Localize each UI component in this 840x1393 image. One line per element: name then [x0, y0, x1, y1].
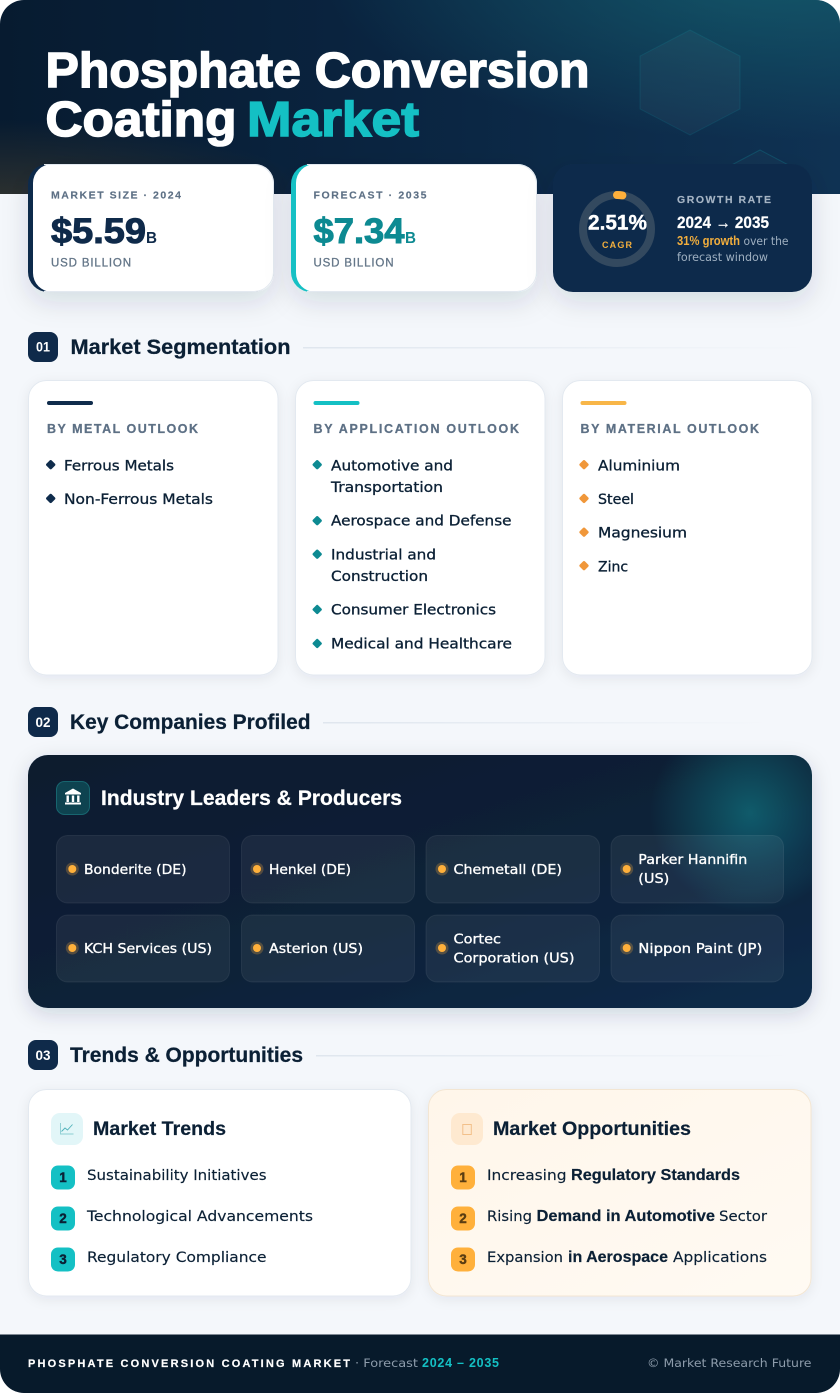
stat card: CAGR growth rate: GROWTH RATE — [677, 194, 771, 206]
donut gauge: CAGR — [602, 240, 632, 250]
stat card: market size 2024: MARKET SIZE · 2024 — [51, 190, 181, 202]
trend 1 — [51, 1166, 266, 1190]
opportunity 2: Sector — [719, 1209, 767, 1225]
opportunity 3: 3 — [459, 1252, 467, 1267]
stat card: market size 2024: B — [146, 230, 157, 247]
footer: PHOSPHATE CONVERSION COATING MARKET — [28, 1358, 350, 1370]
panel: market trends: Market Trends — [93, 1119, 226, 1140]
trend 2: 2 — [59, 1211, 67, 1226]
opportunity 2: Demand in Automotive — [536, 1208, 715, 1225]
title: Coating — [46, 93, 237, 147]
opportunity 1: Regulatory Standards — [571, 1167, 740, 1184]
stat card: market size 2024 — [28, 164, 274, 292]
panel: by material outlook: Aluminium — [598, 458, 680, 474]
title: Phosphate Conversion — [46, 44, 590, 98]
trend 1: Sustainability Initiatives — [87, 1168, 266, 1184]
opportunity 3: Expansion — [487, 1250, 563, 1266]
company chip: Nippon Paint — [611, 915, 784, 982]
icon: placeholder box — [451, 1113, 483, 1145]
section heading: trends and opportunities — [28, 1040, 796, 1070]
panel: by application outlook: Aerospace and Defense — [331, 514, 512, 530]
company chip: Parker Hannifin: Parker Hannifin — [638, 852, 747, 868]
company chip: Cortec: Cortec — [454, 932, 501, 948]
opportunity 3: Applications — [673, 1250, 767, 1266]
stat card: forecast 2035: $7.34 — [314, 212, 405, 251]
trend 2: Technological Advancements — [86, 1209, 313, 1225]
panel: by material outlook: Zinc — [598, 560, 628, 576]
company chip: Bonderite: Bonderite (DE) — [84, 862, 186, 878]
section heading: key companies: Key Companies Profiled — [70, 711, 310, 734]
trend 2 — [51, 1206, 313, 1230]
company chip: KCH Services: KCH Services (US) — [84, 941, 212, 957]
footer: 2024 – 2035 — [422, 1356, 499, 1370]
donut gauge — [583, 195, 651, 263]
section heading: key companies — [28, 707, 773, 737]
panel: market opportunities — [428, 1090, 811, 1296]
panel: by application outlook: Construction — [331, 569, 428, 585]
panel: by metal outlook: Ferrous Metals — [64, 458, 174, 474]
panel: by application outlook: Industrial and — [331, 548, 436, 564]
panel: by application outlook: Automotive and — [331, 458, 453, 474]
footer — [0, 1334, 840, 1393]
opportunity 1: Increasing — [487, 1168, 566, 1184]
stat card: market size 2024: $5.59 — [51, 212, 146, 251]
stat card: CAGR growth rate: forecast window — [677, 250, 768, 264]
opportunity 3 — [451, 1248, 767, 1272]
company chip: Bonderite — [56, 836, 230, 903]
trend 3 — [51, 1248, 267, 1272]
stat card: forecast 2035: FORECAST · 2035 — [314, 190, 427, 202]
panel: by application outlook: BY APPLICATION OUTLOOK — [314, 422, 519, 436]
company chip: KCH Services — [56, 915, 230, 982]
icon: chart — [51, 1113, 83, 1145]
stat card: forecast 2035: USD BILLION — [314, 258, 394, 270]
company chip: Cortec — [426, 915, 600, 982]
section heading: market segmentation: 01 — [36, 340, 50, 354]
company chip: Asterion: Asterion (US) — [269, 941, 363, 957]
section heading: market segmentation — [28, 332, 812, 362]
panel: by material outlook: BY MATERIAL OUTLOOK — [580, 422, 759, 436]
panel: industry leaders — [28, 755, 812, 1008]
icon: bank — [56, 782, 90, 814]
section heading: key companies: 02 — [36, 715, 50, 730]
opportunity 2: Rising — [487, 1209, 532, 1225]
company chip: Parker Hannifin — [611, 836, 784, 903]
panel: industry leaders: Industry Leaders & Producers — [101, 786, 402, 810]
stat card: CAGR growth rate: 31% growth — [677, 234, 740, 248]
panel: by metal outlook: BY METAL OUTLOOK — [47, 422, 198, 436]
stat card: CAGR growth rate: 2024 → 2035 — [677, 214, 769, 232]
trend 1: 1 — [59, 1170, 67, 1185]
stat card: forecast 2035: B — [405, 230, 416, 247]
opportunity 2: 2 — [459, 1211, 467, 1226]
opportunity 1 — [451, 1166, 740, 1190]
stat card: CAGR growth rate — [553, 164, 812, 292]
panel: market opportunities: Market Opportunities — [493, 1119, 691, 1140]
company chip: Henkel: Henkel (DE) — [269, 862, 351, 878]
panel: by metal outlook — [28, 380, 278, 675]
title: Market — [247, 93, 419, 147]
opportunity 1: 1 — [459, 1170, 467, 1185]
stat card: CAGR growth rate: over the — [744, 234, 788, 248]
section heading: trends and opportunities: Trends & Opportunities — [70, 1044, 303, 1067]
company chip: Asterion — [242, 915, 414, 982]
header banner — [0, 0, 840, 200]
panel: by application outlook: Transportation — [330, 480, 443, 496]
panel: by material outlook: Magnesium — [598, 526, 687, 542]
company chip: Chemetall — [426, 836, 600, 903]
company chip: Nippon Paint: Nippon Paint (JP) — [638, 941, 762, 957]
stat card: forecast 2035 — [291, 164, 537, 292]
title — [46, 44, 590, 147]
panel: by application outlook — [296, 380, 545, 675]
company chip: Cortec: Corporation (US) — [454, 950, 574, 966]
opportunity 3: in Aerospace — [568, 1249, 668, 1266]
footer: · Forecast — [355, 1356, 419, 1370]
stat card: market size 2024: USD BILLION — [51, 258, 131, 270]
panel: by material outlook: Steel — [598, 492, 634, 508]
trend 3: Regulatory Compliance — [87, 1250, 267, 1266]
donut gauge: 2.51% — [588, 212, 647, 234]
company chip: Parker Hannifin: (US) — [638, 871, 669, 887]
section heading: trends and opportunities: 03 — [36, 1048, 51, 1063]
section heading: market segmentation: Market Segmentation — [70, 336, 290, 359]
company chip: Chemetall: Chemetall (DE) — [454, 862, 562, 878]
trend 3: 3 — [59, 1252, 67, 1267]
panel: by material outlook — [562, 380, 812, 675]
company chip: Henkel — [242, 836, 414, 903]
opportunity 2 — [451, 1206, 767, 1230]
panel: market trends — [28, 1090, 411, 1296]
footer: © Market Research Future — [647, 1356, 812, 1370]
panel: by metal outlook: Non-Ferrous Metals — [64, 492, 213, 508]
panel: by application outlook: Consumer Electronics — [331, 602, 496, 618]
panel: by application outlook: Medical and Healthcare — [331, 636, 512, 652]
